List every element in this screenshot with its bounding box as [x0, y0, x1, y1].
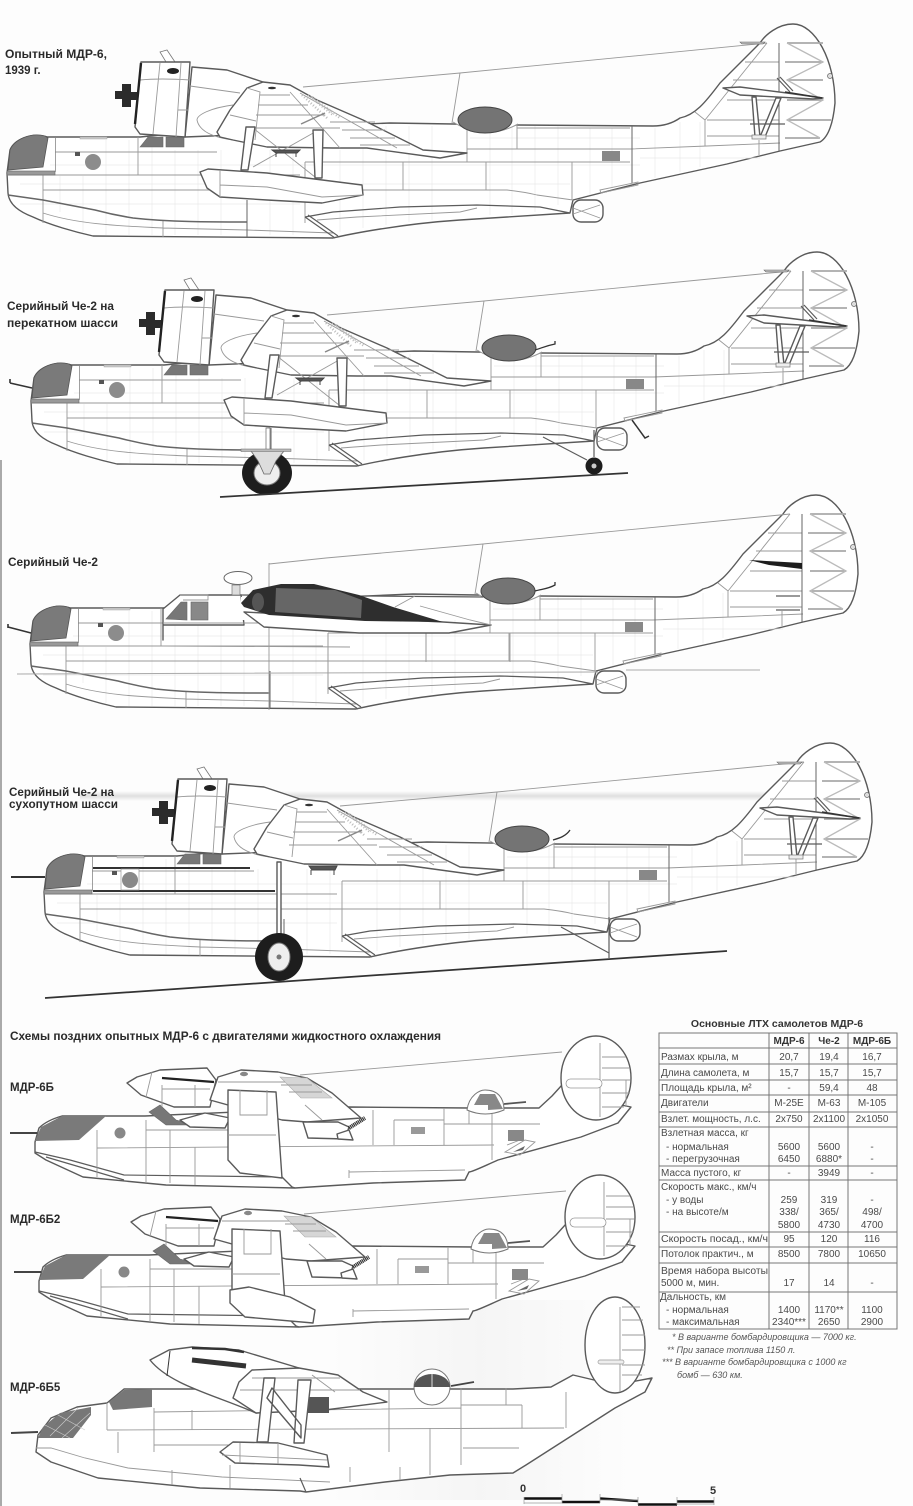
table contents: -	[787, 1168, 791, 1179]
table contents: Размах крыла, м	[661, 1052, 739, 1063]
table contents: 14	[823, 1278, 835, 1289]
table contents: Дальность, км	[660, 1292, 726, 1303]
table contents: - у воды	[666, 1195, 703, 1206]
tail skid	[632, 420, 649, 438]
table contents: 120	[821, 1234, 838, 1245]
table contents: Взлетная масса, кг	[661, 1128, 749, 1139]
table contents: 1170**	[814, 1305, 844, 1316]
table contents: 5600	[818, 1142, 841, 1153]
heading: Che-2 on land gear	[9, 787, 118, 811]
step	[300, 1478, 306, 1492]
ground line	[220, 473, 628, 497]
table contents: 2x1050	[856, 1114, 889, 1125]
turret gun	[535, 341, 555, 350]
heading: late experimental MDR-6 schemes: Схемы поздних опытных МДР-6 с двигателями жидкостного охлаждения	[10, 1031, 441, 1043]
turret gun	[451, 1382, 474, 1386]
turret gun	[535, 582, 555, 591]
footnotes	[662, 1332, 857, 1380]
table contents: - нормальная	[666, 1142, 729, 1153]
table contents: 2900	[861, 1317, 884, 1328]
ground line	[45, 951, 727, 998]
engine nacelle and wing	[115, 50, 467, 158]
label MDR-6B2: МДР-6Б2	[10, 1214, 60, 1226]
heading: experimental MDR-6 1939: 1939 г.	[5, 65, 41, 77]
direction finder loop	[224, 572, 252, 595]
table contents: Взлет. мощность, л.с.	[661, 1114, 761, 1125]
table contents: - перегрузочная	[666, 1154, 740, 1165]
table contents: 5000 м, мин.	[661, 1278, 719, 1289]
heading: serial Che-2: Серийный Че-2	[8, 557, 98, 569]
wing float and struts	[200, 127, 363, 203]
table contents: МДР-6	[773, 1036, 805, 1047]
heading: Che-2 on roll-on gear: перекатном шасси	[7, 318, 118, 330]
table contents: 498/	[862, 1207, 882, 1218]
table contents: 5600	[778, 1142, 801, 1153]
nose gun	[11, 876, 45, 878]
table contents: -	[870, 1278, 874, 1289]
tail gear	[561, 917, 609, 958]
table contents: 365/	[819, 1207, 839, 1218]
turret gun	[553, 830, 570, 840]
table contents: 2340***	[772, 1317, 806, 1328]
fairing upper line	[395, 596, 491, 625]
aircraft: MDR-6B2	[14, 1175, 635, 1327]
table contents: 59,4	[819, 1083, 839, 1094]
table grid	[659, 1033, 897, 1329]
scale bar: 5	[710, 1485, 716, 1497]
aircraft: MDR-6B	[10, 1036, 631, 1188]
label MDR-6B: МДР-6Б	[10, 1082, 54, 1094]
turret	[414, 1369, 450, 1405]
table contents: МДР-6Б	[853, 1036, 891, 1047]
heading: Che-2 on roll-on gear	[7, 301, 118, 330]
footnotes: ** При запасе топлива 1150 л.	[667, 1345, 795, 1355]
aircraft: MDR-6B5	[11, 1297, 652, 1492]
footnotes: *** В варианте бомбардировщика с 1000 кг	[662, 1357, 847, 1367]
dark wing glazing	[241, 584, 443, 622]
tail detail	[776, 596, 800, 610]
table contents: 1400	[778, 1305, 801, 1316]
table contents: 15,7	[862, 1068, 882, 1079]
table contents: М-105	[858, 1098, 887, 1109]
table contents: Че-2	[818, 1036, 840, 1047]
table contents: 6880*	[816, 1154, 842, 1165]
table contents: М-63	[818, 1098, 841, 1109]
table contents: -	[870, 1142, 874, 1153]
table contents: 15,7	[819, 1068, 839, 1079]
scale bar: 0	[520, 1483, 526, 1495]
side panel lines	[93, 868, 275, 891]
table contents: 19,4	[819, 1052, 839, 1063]
tail wheel	[543, 430, 602, 474]
table contents: 16,7	[862, 1052, 882, 1063]
cabin	[163, 595, 510, 710]
panel lines	[36, 1388, 566, 1488]
bomb rack	[309, 866, 337, 875]
nose gun	[11, 1432, 38, 1433]
label MDR-6B5: МДР-6Б5	[10, 1382, 61, 1394]
table contents: Площадь крыла, м²	[661, 1083, 752, 1094]
footnotes: * В варианте бомбардировщика — 7000 кг.	[672, 1332, 857, 1342]
background smudges	[0, 460, 870, 1506]
nose glazing	[38, 1407, 91, 1438]
wing root fairing	[244, 612, 491, 633]
table contents: Скорость посад., км/ч	[661, 1234, 768, 1245]
footnotes: бомб — 630 км.	[677, 1370, 743, 1380]
table contents: 5800	[778, 1220, 801, 1231]
rudder	[585, 1297, 645, 1393]
table contents: 48	[866, 1083, 878, 1094]
table contents	[660, 1036, 891, 1328]
hull	[36, 1375, 652, 1492]
table title: Основные ЛТХ самолетов МДР-6	[691, 1018, 863, 1030]
table contents: - на высоте/м	[666, 1207, 729, 1218]
table contents: 4730	[818, 1220, 841, 1231]
aircraft: serial Che-2 on beaching gear	[10, 252, 859, 497]
table contents: -	[870, 1154, 874, 1165]
wing	[233, 1368, 387, 1413]
tailplane	[723, 42, 823, 139]
table contents: Масса пустого, кг	[661, 1168, 742, 1179]
table contents: -	[787, 1083, 791, 1094]
nose gun	[8, 624, 31, 633]
cockpit	[109, 1389, 152, 1410]
heading: experimental MDR-6 1939: Опытный МДР-6,	[5, 49, 107, 61]
table contents: 116	[864, 1234, 880, 1245]
nose gun	[10, 379, 32, 388]
table contents: 3949	[818, 1168, 841, 1179]
table contents: М-25Е	[774, 1098, 804, 1109]
heading: Che-2 on land gear: Серийный Че-2 на	[9, 787, 115, 799]
table contents: 7800	[818, 1249, 841, 1260]
table contents: 20,7	[779, 1052, 799, 1063]
aircraft: serial Che-2 flying boat	[8, 495, 858, 710]
table contents: Длина самолета, м	[661, 1068, 749, 1079]
table: main specifications	[659, 1018, 897, 1329]
table contents: 338/	[779, 1207, 799, 1218]
table contents: - максимальная	[666, 1317, 740, 1328]
table contents: -	[870, 1168, 874, 1179]
table contents: Двигатели	[661, 1098, 709, 1109]
table contents: 8500	[778, 1249, 801, 1260]
table contents: 2x750	[775, 1114, 803, 1125]
table contents: 2x1100	[813, 1114, 845, 1125]
table contents: 319	[821, 1195, 838, 1206]
table contents: 10650	[858, 1249, 886, 1260]
main wheel	[255, 933, 303, 981]
engine nacelle	[150, 1347, 330, 1413]
main gear strut	[277, 862, 281, 935]
antenna wire	[269, 558, 326, 590]
heading: Che-2 on roll-on gear: Серийный Че-2 на	[7, 301, 115, 313]
table contents: Скорость макс., км/ч	[661, 1182, 756, 1193]
aircraft: serial Che-2 on land undercarriage	[11, 743, 872, 998]
main wheel	[241, 428, 292, 495]
aircraft: experimental MDR-6, 1939	[7, 24, 835, 238]
table contents: 17	[783, 1278, 795, 1289]
scale bar	[520, 1483, 716, 1505]
float	[230, 1287, 315, 1323]
table contents: 4700	[861, 1220, 884, 1231]
table contents: 15,7	[779, 1068, 799, 1079]
table contents: 259	[781, 1195, 798, 1206]
heading: Che-2 on land gear: сухопутном шасси	[9, 799, 118, 811]
table contents: Потолок практич., м	[661, 1249, 754, 1260]
black tailplane section	[749, 560, 802, 569]
table contents: 1100	[861, 1305, 883, 1316]
table contents: 2650	[818, 1317, 841, 1328]
heading: experimental MDR-6 1939	[5, 49, 107, 77]
table contents: - нормальная	[666, 1305, 729, 1316]
table contents: -	[870, 1195, 874, 1206]
wing float and N struts	[220, 1378, 329, 1467]
table contents: Время набора высоты	[661, 1265, 768, 1277]
waterline	[17, 670, 760, 674]
table contents: 95	[783, 1234, 795, 1245]
table contents: 6450	[778, 1154, 801, 1165]
